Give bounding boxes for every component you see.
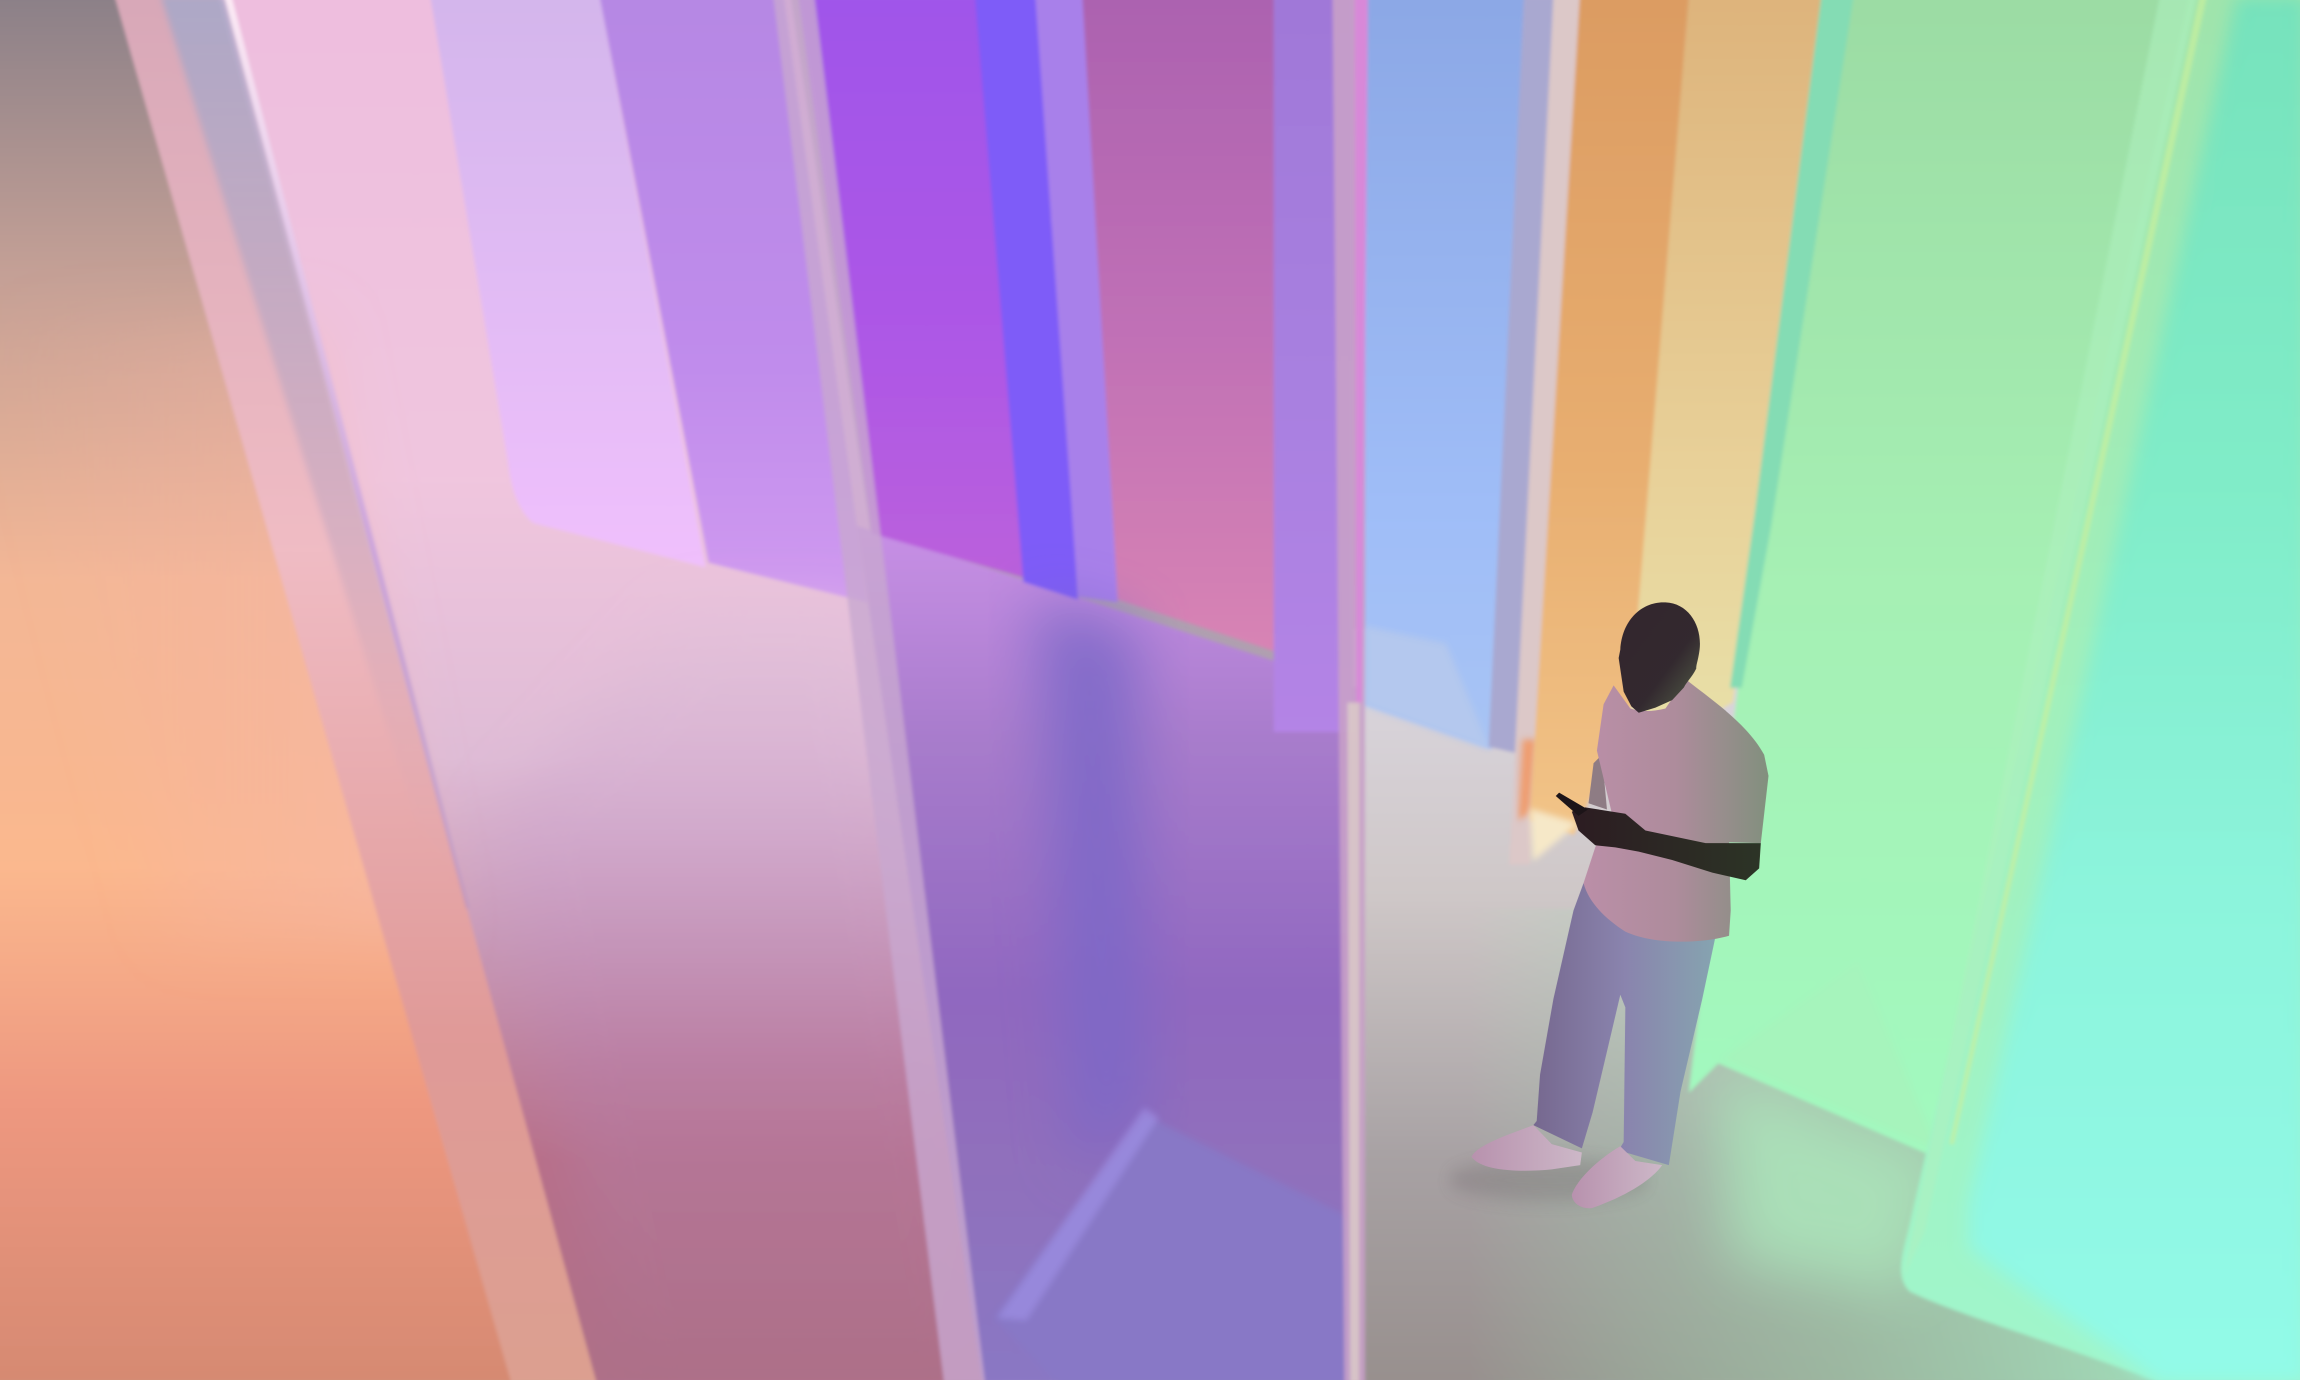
thin edge line [224,0,470,909]
right violet panel [1274,0,1353,732]
orange panel [1530,0,1689,835]
outer mint glass [1901,0,2300,1380]
jeans [1533,883,1716,1165]
t-shirt [1584,679,1768,942]
central glass edge [773,0,985,1380]
pale blade stripe [1347,703,1359,1380]
floor shadow [1448,1159,1649,1201]
floor right [1350,629,2300,1380]
blue panel floor reflection [1365,626,1490,750]
green lower facet [1721,960,1939,1152]
magenta panel [1082,0,1280,651]
light purple panel [600,0,867,602]
orange edge glow [1518,739,1536,820]
person looking at phone [1448,602,1768,1208]
violet reflection below strip [1034,600,1144,1174]
bright pink edge stripe [1355,0,1368,703]
lilac edge band [161,0,467,894]
cream floor patch [1530,809,1578,862]
phone [1556,793,1588,816]
inner cyan mint panel [1968,0,2300,1380]
mid lower glass [496,614,997,1380]
electric violet strip [975,0,1078,600]
left wall soft shade [0,320,438,938]
glass highlight corner [997,1107,1159,1321]
pale floor in glass [994,1115,1350,1380]
purple panel [798,0,1023,577]
head and face [1619,602,1700,713]
pale glass edge [1509,0,1580,864]
lavender panel [430,0,706,567]
front purple glass [857,526,1358,1380]
teal strip [1730,0,1854,688]
green panel [1689,0,2204,1159]
front mint glass edge [1904,0,2197,1277]
blue panel [1365,0,1524,750]
lime stripe [1949,0,2207,1144]
grey strip [1489,0,1559,754]
right glass edge line [1333,0,1365,1380]
forearm and hand [1572,807,1761,880]
left shoe [1471,1125,1582,1171]
far arm [1589,755,1607,809]
violet strip [1035,0,1118,602]
left pink wall [217,0,997,1380]
green floor glow [1718,1071,1939,1291]
right shoe [1572,1146,1662,1208]
left wall [0,0,514,1380]
left glass edge [114,0,597,1380]
tan panel [1630,0,1824,761]
